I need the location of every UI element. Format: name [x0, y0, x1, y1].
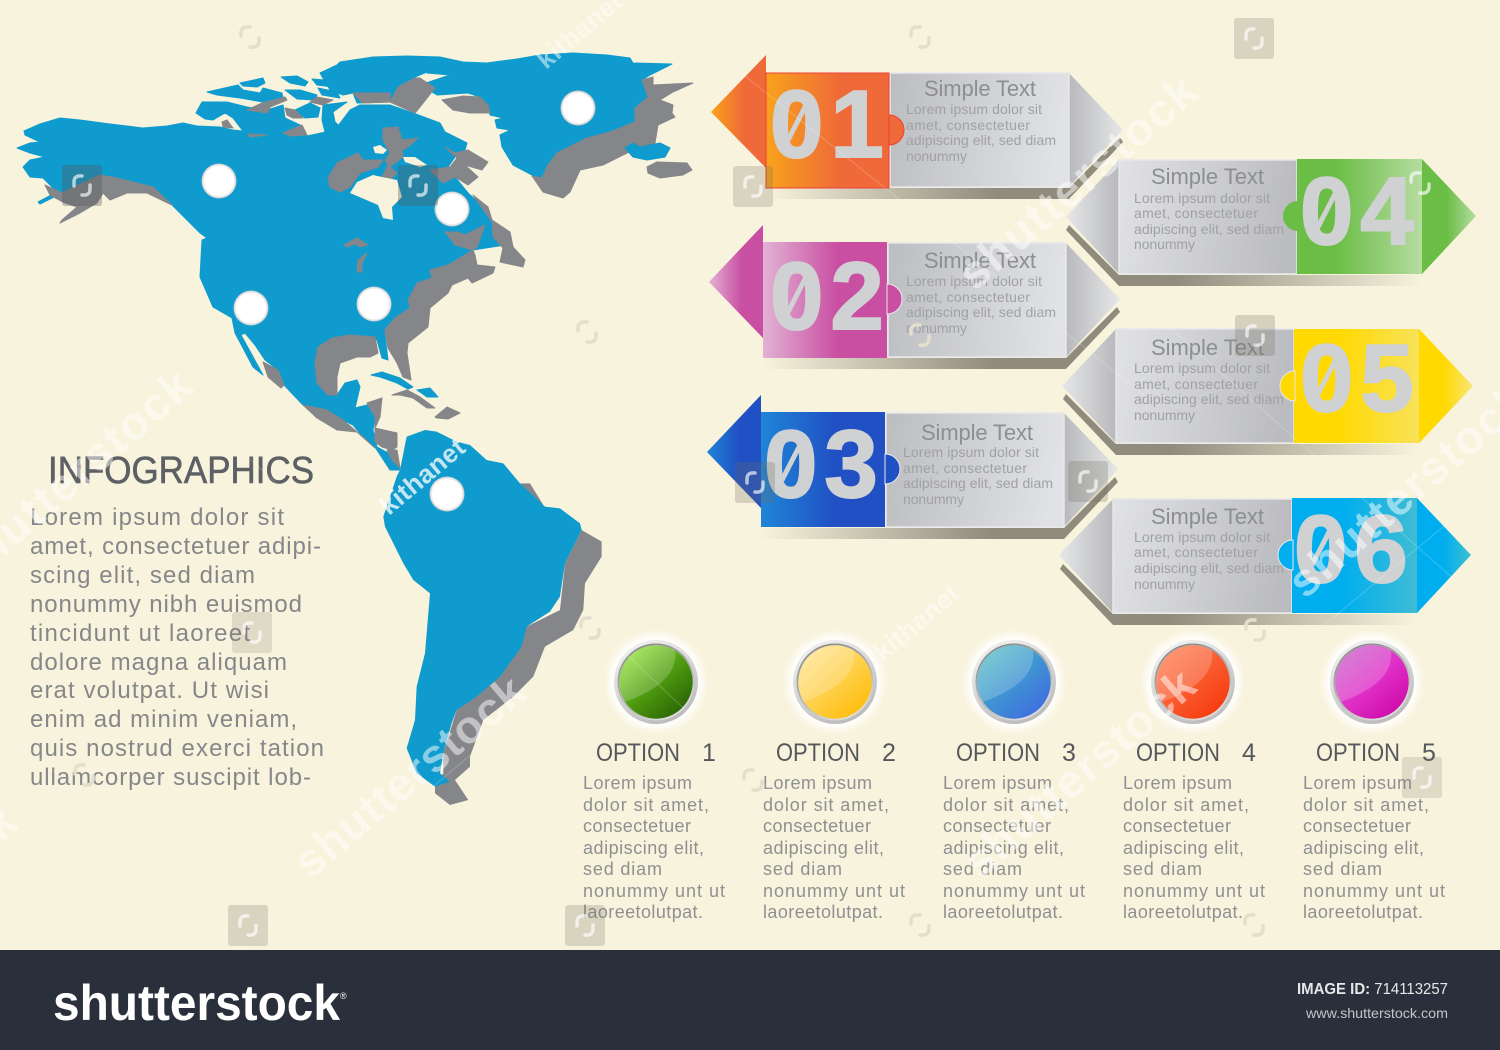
- option 4: [1123, 629, 1265, 922]
- card 02 body: adipiscing elit, sed diam: [906, 304, 1056, 320]
- card 06: [1059, 496, 1471, 625]
- option 1 text: consectetuer: [583, 816, 691, 836]
- option 5 label: 5: [1422, 739, 1436, 767]
- option 3 button: [961, 629, 1067, 735]
- map pin 4: [234, 290, 268, 326]
- map pin 2: [202, 164, 236, 198]
- option 5 text: [1303, 773, 1445, 922]
- card 01 body: nonummy: [906, 148, 967, 164]
- text block: intro paragraph: enim ad minim veniam,: [30, 706, 297, 733]
- option 2 label: OPTION: [776, 739, 860, 767]
- text block: intro paragraph: quis nostrud exerci tation: [30, 735, 324, 762]
- card 03 body: Lorem ipsum dolor sit: [903, 444, 1039, 460]
- text block: intro paragraph: scing elit, sed diam: [30, 562, 255, 589]
- card 05 heading: Simple Text: [1151, 335, 1264, 360]
- text block: intro paragraph: erat volutpat. Ut wisi: [30, 677, 269, 704]
- card 01: [711, 55, 1123, 199]
- option 2 text: adipiscing elit,: [763, 838, 884, 858]
- option 5 text: dolor sit amet,: [1303, 795, 1429, 815]
- option 4 text: sed diam: [1123, 859, 1202, 879]
- map pin 3: [434, 192, 470, 226]
- option 2 text: [763, 773, 905, 922]
- card 03: [707, 395, 1118, 539]
- card 02 body: nonummy: [906, 320, 967, 336]
- option 2 text: sed diam: [763, 859, 842, 879]
- number 04: 04: [1300, 158, 1421, 265]
- option 2 text: Lorem ipsum: [763, 773, 872, 793]
- option 1 label: OPTION: [596, 739, 680, 767]
- footer bar: [0, 950, 1500, 1050]
- text block: intro paragraph: dolore magna aliquam: [30, 649, 287, 676]
- card 02 body: Lorem ipsum dolor sit: [906, 273, 1042, 289]
- card 05 body: nonummy: [1134, 407, 1195, 423]
- option 3 text: sed diam: [943, 859, 1022, 879]
- card 06 body: adipiscing elit, sed diam: [1134, 560, 1284, 576]
- card 03 body: [903, 444, 1053, 507]
- option 1 text: laoreetolutpat.: [583, 902, 703, 922]
- option 1 text: Lorem ipsum: [583, 773, 692, 793]
- option 3 text: laoreetolutpat.: [943, 902, 1063, 922]
- card 05 body: adipiscing elit, sed diam: [1134, 391, 1284, 407]
- card 04 body: adipiscing elit, sed diam: [1134, 221, 1284, 237]
- text block: intro paragraph: nonummy nibh euismod: [30, 591, 302, 618]
- option 5 text: Lorem ipsum: [1303, 773, 1412, 793]
- card 04 body: [1134, 190, 1284, 252]
- hudson bay and inland water: [350, 145, 427, 220]
- option 2: [763, 629, 905, 922]
- text block: intro paragraph: amet, consectetuer adipi-: [30, 533, 321, 560]
- card 01 body: [906, 101, 1056, 164]
- card 02 body: amet, consectetuer: [906, 289, 1030, 305]
- option 5 text: consectetuer: [1303, 816, 1411, 836]
- option 3 text: [943, 773, 1085, 922]
- map: the Americas: [17, 53, 693, 805]
- number 06: 06: [1294, 496, 1415, 603]
- option 1 text: nonummy unt ut: [583, 881, 725, 901]
- card 04 body: amet, consectetuer: [1134, 205, 1258, 221]
- option 4 text: laoreetolutpat.: [1123, 902, 1243, 922]
- text block: intro paragraph: [30, 504, 324, 791]
- option 4 text: consectetuer: [1123, 816, 1231, 836]
- option 1 text: adipiscing elit,: [583, 838, 704, 858]
- option 2 text: consectetuer: [763, 816, 871, 836]
- option 5 button: [1319, 629, 1425, 735]
- footer logo: shutterstock: [53, 975, 340, 1031]
- islands over the shading: [371, 143, 670, 397]
- option 1 text: dolor sit amet,: [583, 795, 709, 815]
- map pin 1: [560, 90, 596, 126]
- number 05: 05: [1300, 325, 1421, 432]
- option 3 label: OPTION: [956, 739, 1040, 767]
- text block: intro paragraph: Lorem ipsum dolor sit: [30, 504, 284, 531]
- relief shading in grey: [45, 77, 693, 468]
- option 5 label: OPTION: [1316, 739, 1400, 767]
- number 03: 03: [764, 411, 885, 518]
- footer image id: IMAGE ID: 714113257: [1297, 981, 1448, 998]
- card 06 body: nonummy: [1134, 576, 1195, 592]
- option 5 text: sed diam: [1303, 859, 1382, 879]
- option 4 label: 4: [1242, 739, 1256, 767]
- option 4 text: dolor sit amet,: [1123, 795, 1249, 815]
- card 04 heading: Simple Text: [1151, 164, 1264, 189]
- footer logo: ®: [340, 991, 347, 1001]
- map pin 5: [356, 286, 392, 322]
- card 03 body: adipiscing elit, sed diam: [903, 475, 1053, 491]
- option 2 text: dolor sit amet,: [763, 795, 889, 815]
- option 2 text: nonummy unt ut: [763, 881, 905, 901]
- text block: intro paragraph: tincidunt ut laoreet: [30, 620, 250, 647]
- card 04 body: nonummy: [1134, 236, 1195, 252]
- card 01 body: adipiscing elit, sed diam: [906, 132, 1056, 148]
- card 03 heading: Simple Text: [921, 420, 1033, 445]
- option 4 text: nonummy unt ut: [1123, 881, 1265, 901]
- watermark overlay: shutterstock: [947, 65, 1207, 300]
- number 02: 02: [770, 243, 891, 350]
- option 1: [583, 629, 725, 922]
- card 05: [1062, 325, 1473, 455]
- card 06 heading: Simple Text: [1151, 504, 1264, 529]
- card 01 body: Lorem ipsum dolor sit: [906, 101, 1042, 117]
- option 3 text: nonummy unt ut: [943, 881, 1085, 901]
- option 2 label: 2: [882, 739, 896, 767]
- north america land in blue: [17, 53, 672, 470]
- card 03 body: amet, consectetuer: [903, 460, 1027, 476]
- option 1 button: [603, 629, 709, 735]
- card 04: [1066, 158, 1476, 286]
- option 5: [1303, 629, 1445, 922]
- footer url: www.shutterstock.com: [1305, 1005, 1448, 1021]
- heading: infographics: INFOGRAPHICS: [48, 450, 314, 492]
- option 3 label: 3: [1062, 739, 1076, 767]
- option 3 text: Lorem ipsum: [943, 773, 1052, 793]
- option 4 text: [1123, 773, 1265, 922]
- option 4 button: [1140, 629, 1246, 735]
- map pin 6: [430, 476, 464, 512]
- option 5 text: adipiscing elit,: [1303, 838, 1424, 858]
- option 3 text: consectetuer: [943, 816, 1051, 836]
- option 5 text: nonummy unt ut: [1303, 881, 1445, 901]
- card 05 body: Lorem ipsum dolor sit: [1134, 360, 1270, 376]
- watermark overlay: shutterstock: [283, 664, 535, 888]
- watermark overlay: kithanet: [374, 432, 471, 521]
- option 5 text: laoreetolutpat.: [1303, 902, 1423, 922]
- south america land: [383, 430, 602, 805]
- option 3: [943, 629, 1085, 922]
- card 01 body: amet, consectetuer: [906, 117, 1030, 133]
- number 01: 01: [770, 71, 891, 178]
- card 05 body: [1134, 360, 1284, 423]
- card 02: [709, 225, 1120, 369]
- card 03 body: nonummy: [903, 491, 964, 507]
- option 1 label: 1: [702, 739, 716, 767]
- card 06 body: amet, consectetuer: [1134, 544, 1258, 560]
- text block: intro paragraph: ullamcorper suscipit lob-: [30, 764, 311, 791]
- option 3 text: adipiscing elit,: [943, 838, 1064, 858]
- watermark overlay: kithanet: [868, 578, 965, 667]
- card 01 heading: Simple Text: [924, 76, 1036, 101]
- card 02 heading: Simple Text: [924, 248, 1036, 273]
- card 02 body: [906, 273, 1056, 336]
- option 4 label: OPTION: [1136, 739, 1220, 767]
- option 4 text: adipiscing elit,: [1123, 838, 1244, 858]
- option 3 text: dolor sit amet,: [943, 795, 1069, 815]
- card 04 body: Lorem ipsum dolor sit: [1134, 190, 1270, 206]
- option 2 text: laoreetolutpat.: [763, 902, 883, 922]
- watermark overlay: shutterstock: [952, 658, 1206, 888]
- card 06 body: Lorem ipsum dolor sit: [1134, 529, 1270, 545]
- option 1 text: [583, 773, 725, 922]
- option 4 text: Lorem ipsum: [1123, 773, 1232, 793]
- option 1 text: sed diam: [583, 859, 662, 879]
- card 05 body: amet, consectetuer: [1134, 376, 1258, 392]
- card 06 body: [1134, 529, 1284, 592]
- option 2 button: [782, 629, 888, 735]
